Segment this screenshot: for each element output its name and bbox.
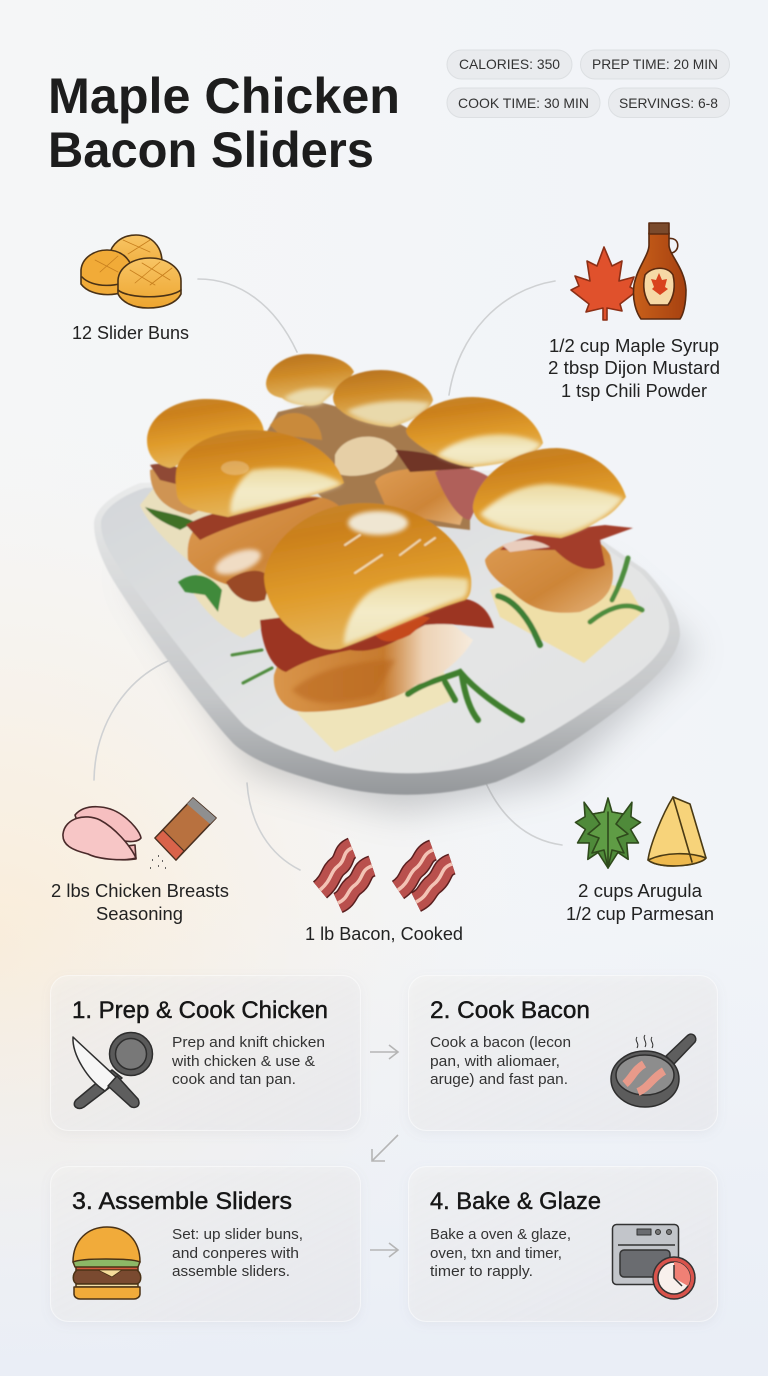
slider: front [232,503,522,752]
ingredient label: greens and cheese [566,881,714,924]
ingredient label: glaze: 1 tsp Chili Powder [561,381,707,401]
body text: assemble sliders. [172,1263,290,1280]
step 2 card [408,976,718,1130]
pill: calories: CALORIES: 350 [459,56,560,72]
ingredient label: greens and cheese: 2 cups Arugula [578,881,703,901]
arrow: step 2 to step 3 [372,1135,398,1161]
connector lines [94,279,562,870]
body text [430,1226,571,1280]
body text [430,1034,571,1088]
body text: with chicken & use & [171,1053,315,1070]
heading: 4. Bake & Glaze [430,1188,601,1215]
maple leaf [571,247,637,320]
slider: right [473,448,643,663]
pill: calories [447,50,572,79]
body text: Prep and knift chicken [172,1034,325,1051]
ingredient label: glaze [548,336,720,401]
arrow: step 3 to step 4 [370,1243,398,1257]
back filling mass [262,402,470,530]
slider: back right [375,397,543,525]
body text: timer to rapply. [430,1263,533,1280]
ingredient label: glaze: 1/2 cup Maple Syrup [549,336,719,356]
plate [94,470,680,795]
parmesan dusting [348,511,408,535]
pill: servings [608,88,730,118]
heading: 2. Cook Bacon [430,997,590,1024]
icon: chicken breasts [63,807,141,860]
body text: oven, txn and timer, [430,1245,562,1262]
slider: far left [140,399,264,585]
icon: maple leaf and syrup bottle [571,223,686,320]
ingredient label: greens and cheese: 1/2 cup Parmesan [566,904,714,924]
pill: prep time [580,50,730,79]
body text: cook and tan pan. [172,1071,296,1088]
body text: and conperes with [172,1245,299,1262]
icon: frying pan with bacon [611,1034,696,1107]
arrow: step 1 to step 2 [370,1045,398,1059]
body text: Bake a oven & glaze, [430,1226,571,1243]
step 1 card [50,976,360,1130]
icon: oven and timer [612,1224,695,1299]
slider: left middle [176,430,344,638]
title: Bacon Sliders [48,122,374,178]
ingredient label: bacon: 1 lb Bacon, Cooked [305,924,463,944]
title [48,68,400,178]
icon: arugula [565,795,651,875]
sliders [140,354,643,752]
step 3 card [50,1166,360,1322]
plate shadow [130,570,695,812]
arugula [408,672,522,720]
pill: servings: SERVINGS: 6-8 [619,95,718,111]
ingredient label: chicken: Seasoning [96,904,183,924]
icon: parmesan wedge [648,797,706,866]
body text [172,1226,303,1280]
ingredient label: chicken [51,881,229,924]
body text: Cook a bacon (lecon [430,1034,571,1051]
pill: prep time: PREP TIME: 20 MIN [592,56,718,72]
icon: knife and pan [73,1032,152,1108]
syrup bottle [633,223,686,319]
heading: 3. Assemble Sliders [72,1188,292,1215]
ingredient label: glaze: 2 tbsp Dijon Mustard [548,358,720,378]
icon: seasoning shaker [150,798,216,868]
step 4 card [408,1166,718,1322]
body text: pan, with aliomaer, [430,1053,560,1070]
ingredient label: chicken: 2 lbs Chicken Breasts [51,881,229,901]
icon: bacon strips [320,848,452,903]
hero photo: sliders on a white plate [94,354,695,812]
pill: cook time: COOK TIME: 30 MIN [458,95,589,111]
pill: cook time [447,88,600,118]
ingredient label: buns: 12 Slider Buns [72,323,189,343]
icon: burger [73,1227,141,1299]
title: Maple Chicken [48,68,400,124]
body text: aruge) and fast pan. [430,1071,568,1088]
icon: slider buns [81,235,181,308]
stat pills [447,50,730,118]
body text: Set: up slider buns, [172,1226,303,1243]
heading: 1. Prep & Cook Chicken [72,997,328,1024]
body text [171,1034,325,1088]
slider: back center [266,354,433,476]
